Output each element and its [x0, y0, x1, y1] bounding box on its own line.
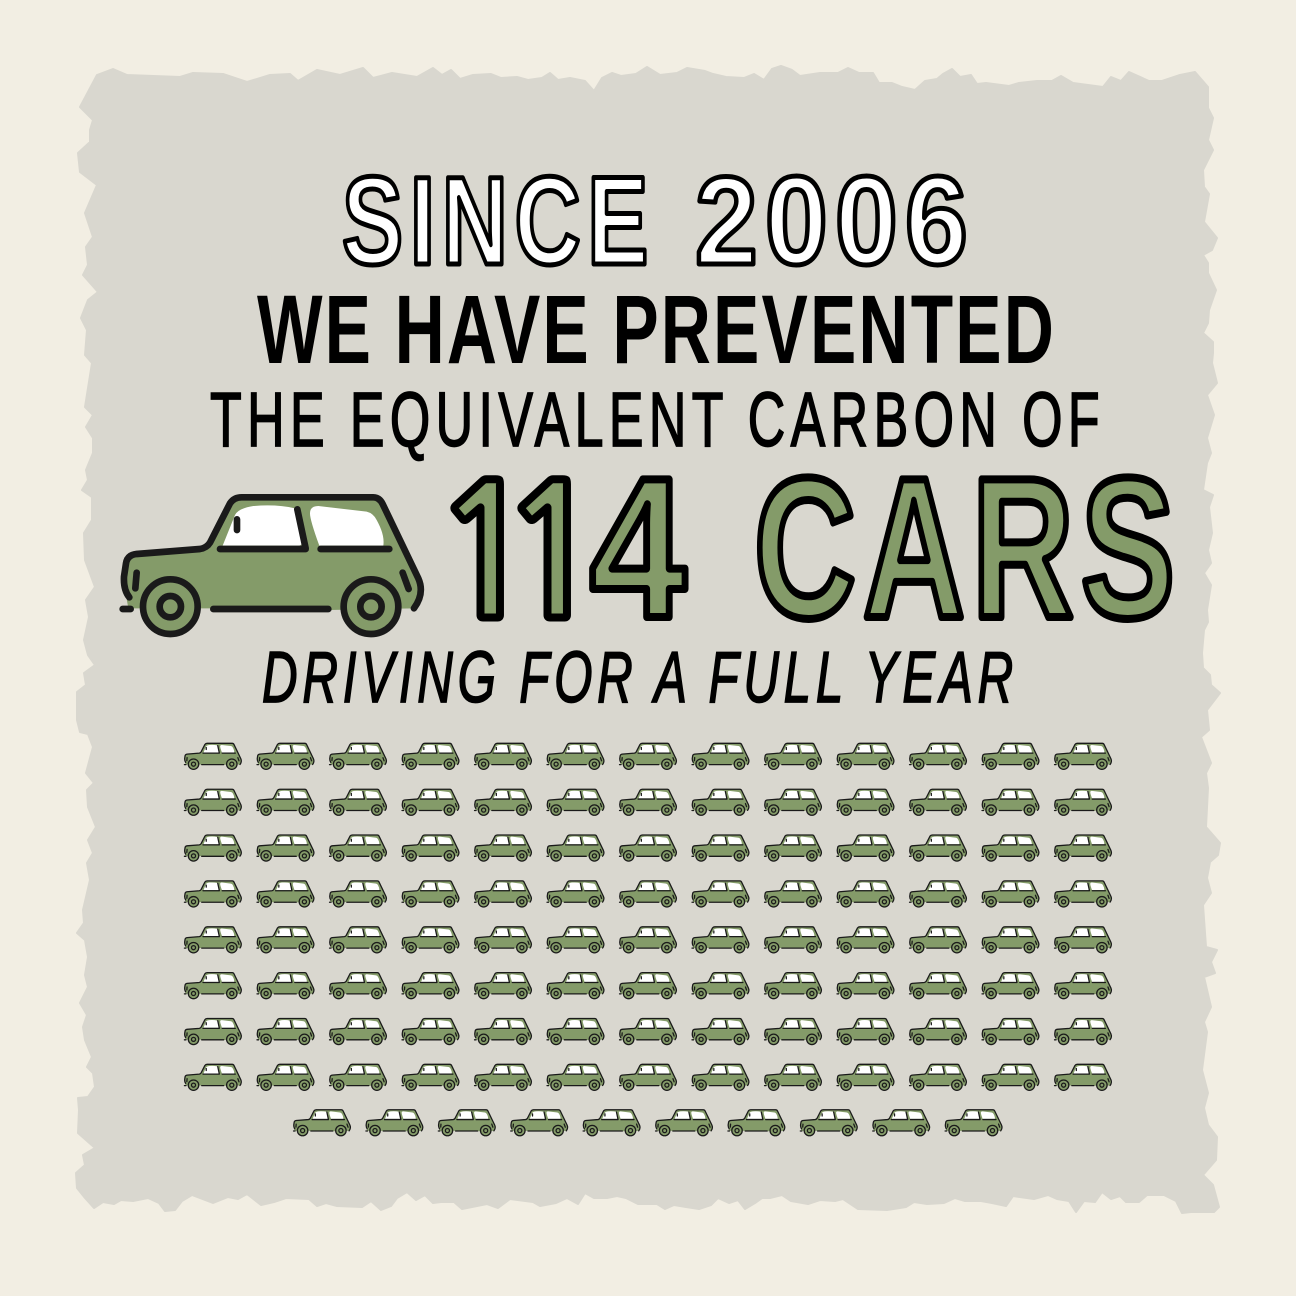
heading: since 2006: [342, 152, 975, 291]
car row 4: [184, 881, 1111, 907]
car row 7: [184, 1018, 1111, 1045]
icon: large green car: [123, 497, 421, 634]
heading: since 2006: 2006: [695, 152, 975, 291]
heading: 114 cars: 1: [498, 465, 608, 645]
chart: 114 small car pictogram grid: [184, 743, 1111, 1136]
car row 8: [184, 1064, 1111, 1090]
heading: 114 cars: 1: [431, 465, 541, 645]
car row 9: [294, 1110, 1002, 1136]
car row 1: [184, 743, 1111, 769]
car row 6: [184, 972, 1111, 999]
heading: 114 cars: [431, 437, 1182, 660]
heading: 114 cars: 4: [590, 437, 686, 660]
car row 3: [184, 835, 1111, 861]
heading: since 2006: SINCE: [342, 152, 655, 291]
car row 5: [184, 927, 1111, 953]
car row 2: [184, 789, 1111, 815]
panel: torn paper card: [76, 66, 1220, 1213]
